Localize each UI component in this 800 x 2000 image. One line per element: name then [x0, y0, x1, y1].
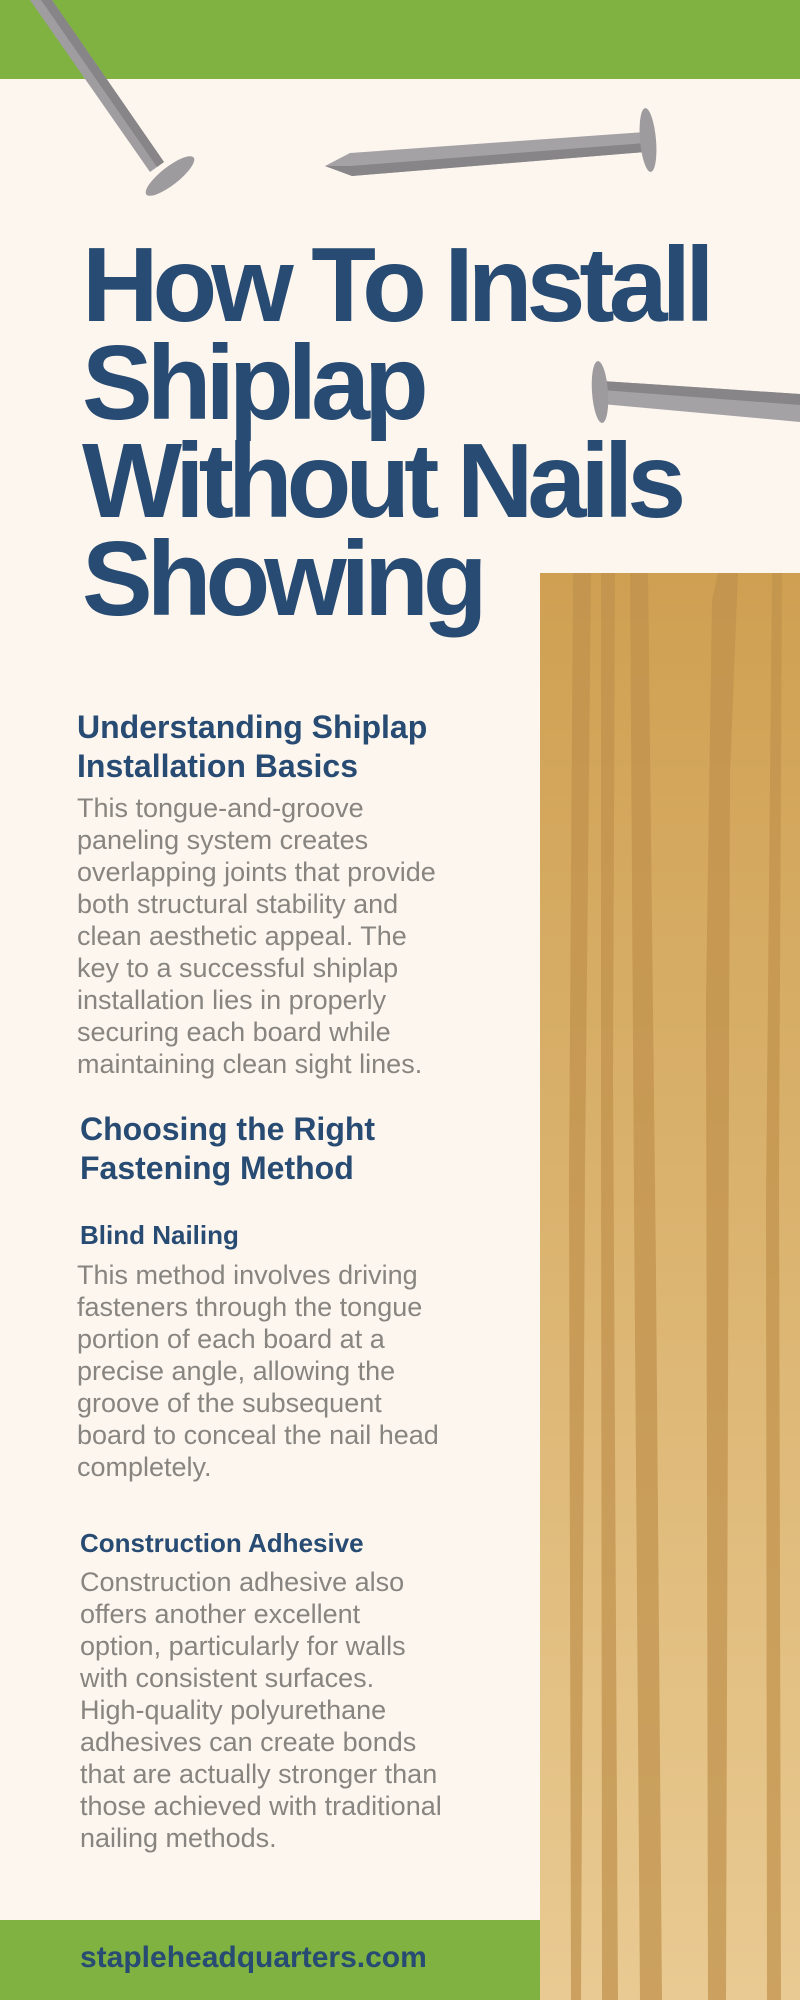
paragraph: adhesive: High-quality polyurethane: [80, 1695, 386, 1725]
paragraph: adhesive: [80, 1567, 442, 1853]
subheading: construction adhesive: Construction Adhesive: [80, 1528, 364, 1558]
title: Showing: [82, 520, 482, 638]
title: Without Nails: [82, 422, 680, 540]
subheading: blind nailing: Blind Nailing: [80, 1220, 239, 1250]
nail 2: [325, 107, 659, 176]
footer bar with url: stapleheadquarters.com: [80, 1941, 427, 1974]
paragraph: adhesive: Construction adhesive also: [80, 1567, 404, 1597]
paragraph: adhesive: with consistent surfaces.: [80, 1663, 374, 1693]
top green bar: [0, 0, 800, 79]
paragraph: adhesive: that are actually stronger than: [80, 1759, 437, 1789]
wood panel: [540, 573, 800, 2000]
paragraph: basics: This tongue-and-groove paneling system creates overlapping joints that provide both structural stability and clean aesthetic appeal. The key to a successful shiplap installation lies in properly securing each board while maintaining clean sight lines.: [77, 793, 436, 1079]
title: Shiplap: [82, 324, 423, 442]
paragraph: adhesive: nailing methods.: [80, 1823, 277, 1853]
paragraph: blind nailing: This method involves driving fasteners through the tongue portion of each board at a precise angle, allowing the groove of the subsequent board to conceal the nail head completely.: [77, 1260, 439, 1482]
paragraph: adhesive: those achieved with traditional: [80, 1791, 442, 1821]
heading: understanding basics: [77, 709, 427, 784]
paragraph: adhesive: option, particularly for walls: [80, 1631, 406, 1661]
heading: fastening method: [80, 1111, 375, 1186]
nails: [30, 0, 800, 423]
paragraph: adhesive: adhesives can create bonds: [80, 1727, 416, 1757]
title: How To Install: [82, 226, 709, 344]
footer bar with url: [0, 1920, 540, 2000]
title: [82, 226, 709, 638]
nail 3: [590, 361, 800, 423]
nail 1: [30, 0, 199, 202]
heading: fastening method: Choosing the Right: [80, 1111, 375, 1147]
paragraph: adhesive: offers another excellent: [80, 1599, 360, 1629]
heading: understanding basics: Understanding Shiplap: [77, 709, 427, 745]
heading: understanding basics: Installation Basics: [77, 748, 358, 784]
heading: fastening method: Fastening Method: [80, 1150, 354, 1186]
